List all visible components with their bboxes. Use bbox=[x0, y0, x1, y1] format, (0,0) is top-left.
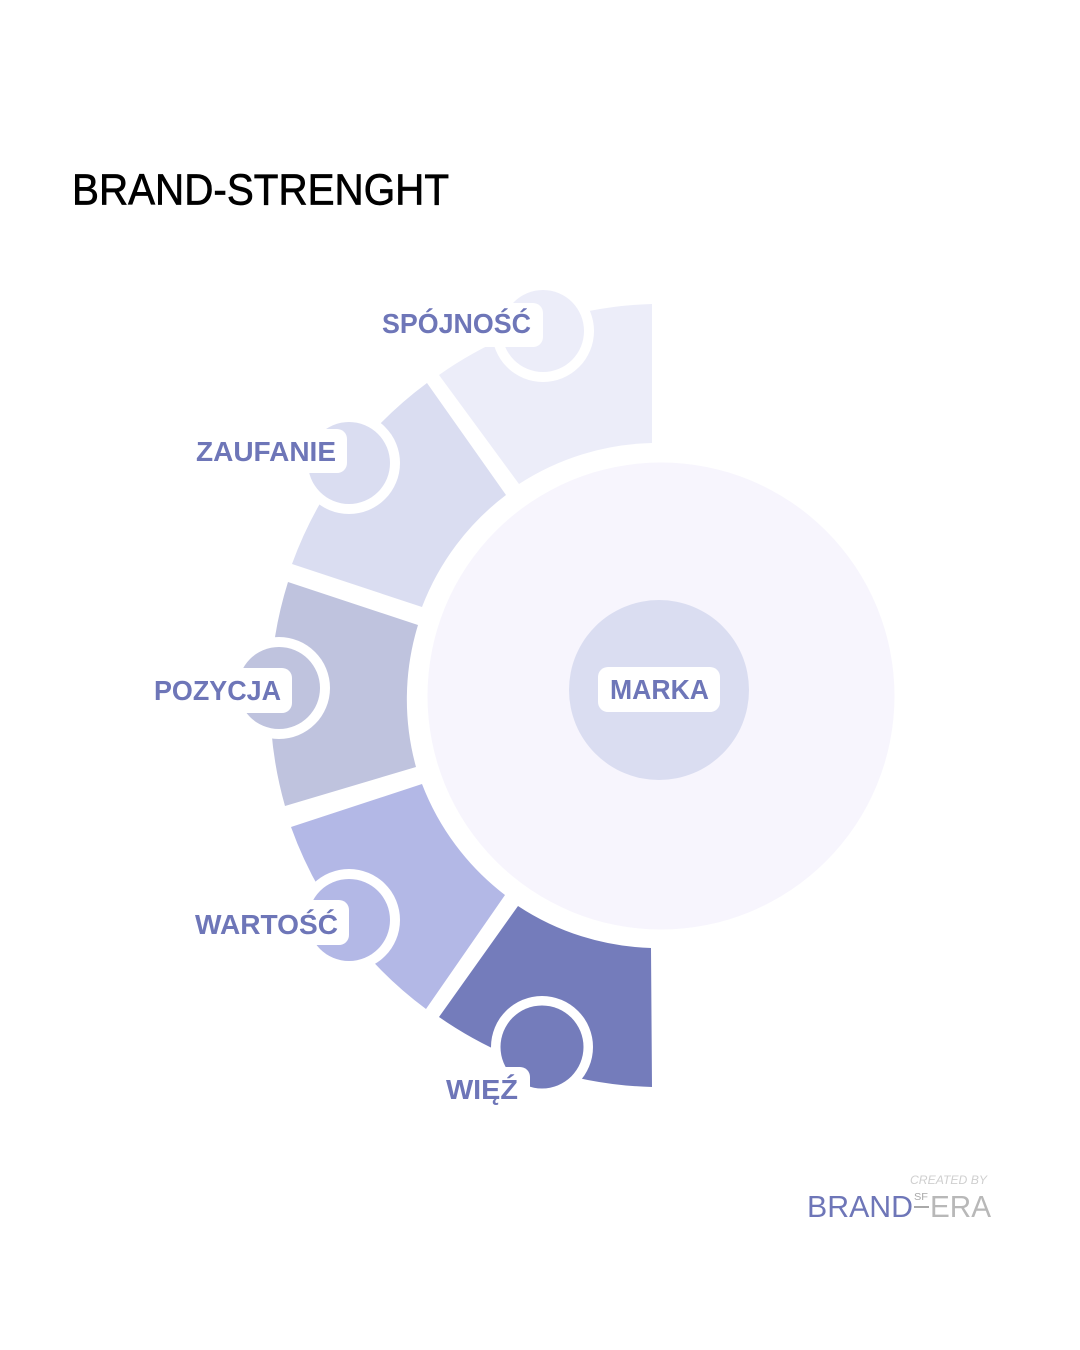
era wordmark: ERA bbox=[930, 1189, 991, 1224]
created by: CREATED BY bbox=[910, 1173, 988, 1187]
inner circle: marka bbox=[569, 600, 749, 780]
segment: zaufanie: ZAUFANIE bbox=[196, 436, 336, 467]
segment: wartość bbox=[183, 784, 505, 1009]
title: BRAND-STRENGHT bbox=[72, 166, 449, 214]
segment: spójność: SPÓJNOŚĆ bbox=[382, 308, 531, 339]
segment: zaufanie bbox=[185, 383, 506, 607]
panel: central circle bbox=[428, 462, 894, 930]
segment: więź bbox=[434, 906, 652, 1111]
sf mark: SF bbox=[914, 1192, 928, 1203]
segment: pozycja: POZYCJA bbox=[154, 675, 281, 706]
label: marka bbox=[598, 667, 720, 712]
brand wordmark: BRAND bbox=[807, 1189, 913, 1224]
segment: wartość: WARTOŚĆ bbox=[195, 909, 338, 940]
segment: spójność bbox=[370, 280, 652, 484]
segment: pozycja bbox=[142, 582, 418, 806]
footer logo bbox=[807, 1173, 991, 1224]
label: marka: MARKA bbox=[610, 674, 709, 705]
segment: więź: WIĘŹ bbox=[446, 1074, 518, 1105]
